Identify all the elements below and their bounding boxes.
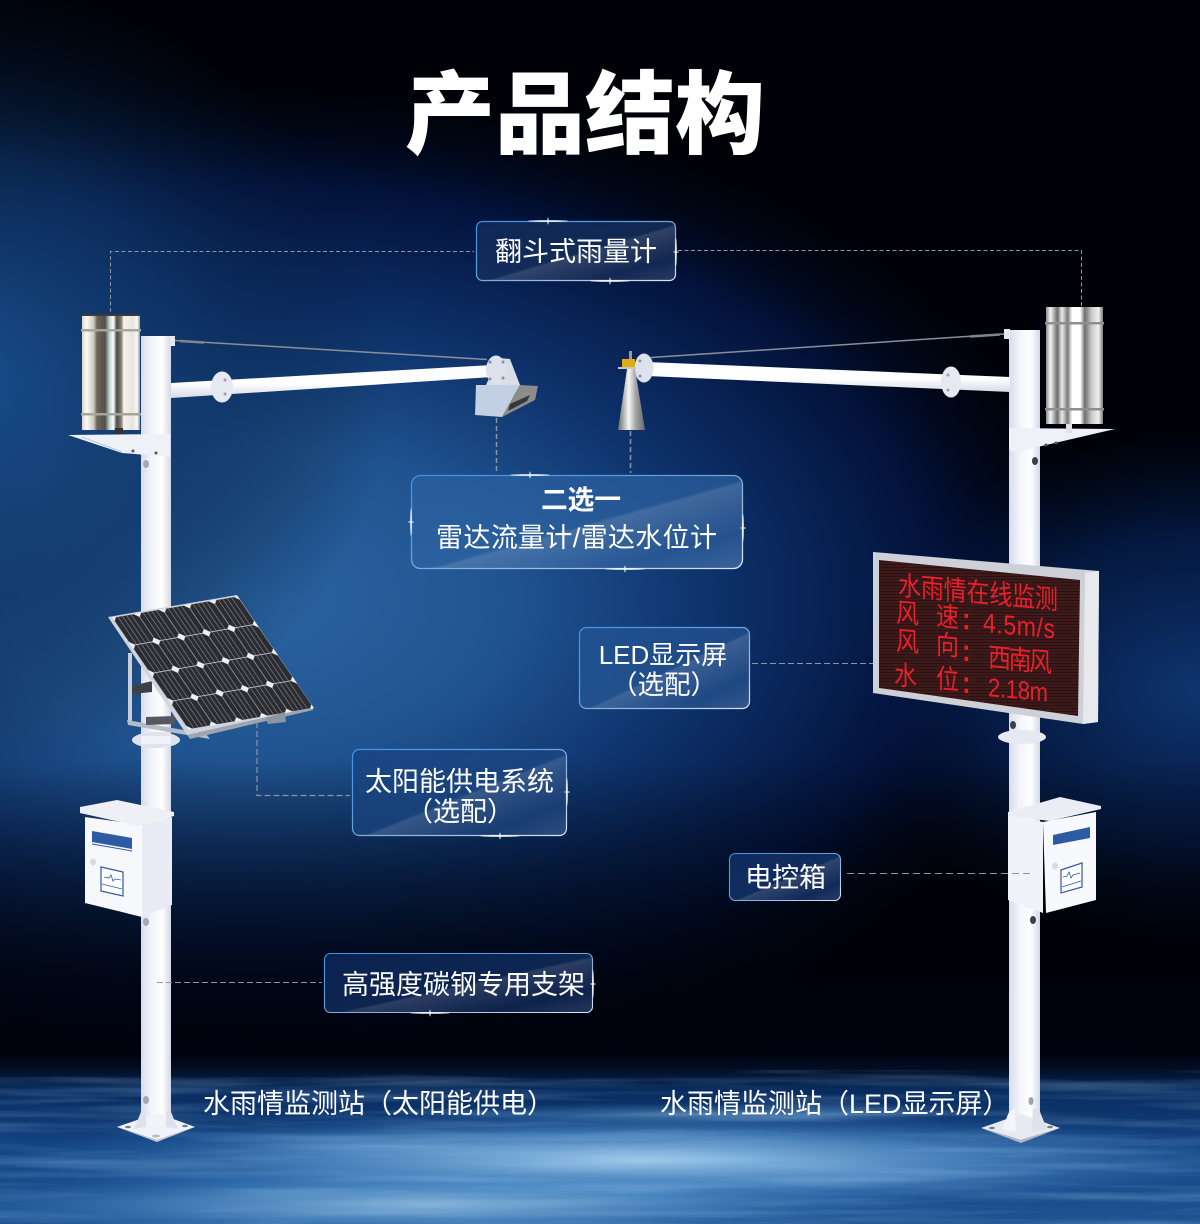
label: solar power system optional: （选配） [406,797,514,827]
caption: solar powered station: 水雨情监测站（太阳能供电） [203,1089,554,1119]
label: high strength steel bracket: 高强度碳钢专用支架 [342,970,585,1000]
label: LED display optional: （选配） [611,670,717,700]
box schematic sign [1061,863,1082,893]
label: control box [730,854,840,900]
left control box [80,800,174,917]
left stay cable [170,336,487,360]
left arm [171,365,492,398]
title: 产品结构 [405,66,765,166]
caption: LED display station: 水雨情监测站（LED显示屏） [660,1089,1010,1119]
right control box [1008,797,1101,913]
LED screen text: 风 [896,598,919,630]
right pole holes [1010,457,1038,1105]
left pole [141,336,171,1122]
LED screen text: 4.5m/s [983,608,1055,645]
left gauge bracket [68,434,170,457]
label: control box: 电控箱 [745,863,826,893]
solar panel system [108,595,314,748]
right arm flange [941,366,961,398]
box nameplate [92,831,132,849]
left arm flange [211,372,233,402]
label: LED display optional [580,628,750,708]
left pole base [117,1110,195,1142]
radar flow meter [475,356,538,417]
LED screen text: 2.18m [988,673,1048,708]
LED screen text: : [962,634,971,669]
label: choose one radar: 二选一 [541,485,621,515]
LED mount collar [998,730,1046,744]
label: choose one radar [408,472,746,572]
LED screen text: 西南风 [988,643,1052,679]
LED screen text: : [962,666,971,701]
right gauge bracket [1009,424,1115,452]
right station: LED display [618,307,1115,1143]
label: LED display optional: LED显示屏 [599,640,727,670]
right rain gauge [1045,307,1104,424]
right pole [1009,330,1040,1122]
LED display [873,552,1099,724]
LED screen text: : [962,602,971,637]
LED screen text: 速 [936,602,959,634]
right pole base [981,1108,1060,1143]
LED screen text: 向 [936,630,959,662]
LED screen text: 位 [936,664,959,696]
right arm [647,362,1010,392]
label: solar power system optional [352,750,570,840]
box schematic sign [101,867,123,896]
LED screen text: 风 [896,626,919,659]
pole holes [143,460,149,1104]
label: tipping bucket rain gauge: 翻斗式雨量计 [495,237,657,267]
box nameplate [1053,827,1090,845]
dashed leader lines [110,250,1082,982]
LED screen text [894,571,1058,709]
label: solar power system optional: 太阳能供电系统 [365,767,554,797]
LED screen text: 水 [894,660,917,693]
label: high strength steel bracket [324,954,596,1016]
LED screen text: 水雨情在线监测 [898,571,1058,616]
right stay cable [651,329,1010,358]
label: tipping bucket rain gauge [476,218,679,284]
left rain gauge [81,314,141,438]
radar level meter [618,351,654,430]
label: choose one radar: 雷达流量计/雷达水位计 [436,523,717,553]
left station: solar powered [68,314,538,1142]
